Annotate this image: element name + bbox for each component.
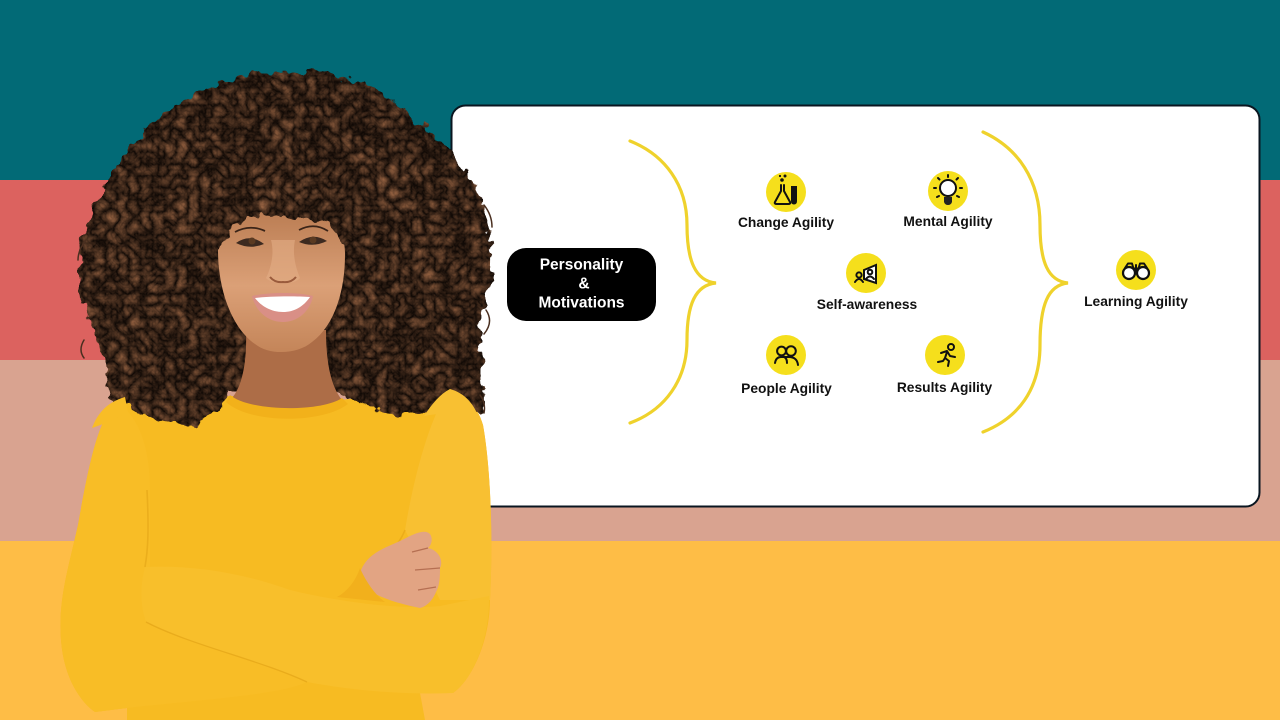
sweater cuff bbox=[337, 568, 385, 602]
hand fingers bbox=[412, 548, 440, 590]
box: Personality & Motivations: Motivations bbox=[538, 294, 625, 312]
box: Personality & Motivations bbox=[507, 248, 656, 321]
hand bbox=[361, 532, 441, 608]
background band: coral bbox=[0, 180, 1280, 360]
background band: teal bbox=[0, 0, 1280, 180]
sweater collar bbox=[226, 395, 348, 419]
box: Personality & Motivations: Personality bbox=[540, 256, 624, 274]
box: Personality & Motivations: & bbox=[578, 276, 590, 292]
right shoulder over hair bbox=[424, 389, 481, 424]
left sleeve shading bbox=[60, 402, 307, 712]
background band: dusty pink bbox=[0, 360, 1280, 541]
item: Change Agility: Change Agility bbox=[738, 215, 834, 230]
item: Results Agility bbox=[897, 335, 992, 395]
item: Self-awareness bbox=[817, 253, 918, 312]
item: Mental Agility bbox=[903, 171, 993, 229]
crossed forearm bbox=[141, 567, 489, 693]
face bbox=[218, 205, 345, 352]
item: Learning Agility bbox=[1084, 250, 1188, 309]
torso shadow bbox=[145, 490, 405, 568]
right brace bbox=[983, 132, 1068, 432]
hair mass bbox=[79, 71, 491, 424]
item: Change Agility bbox=[738, 172, 834, 230]
background band: amber bbox=[0, 541, 1280, 720]
right sleeve bbox=[405, 390, 491, 600]
eyes bbox=[235, 226, 328, 247]
item: People Agility: People Agility bbox=[741, 381, 832, 396]
bangs bbox=[207, 178, 353, 262]
sweater body bbox=[60, 388, 491, 720]
nose bbox=[270, 277, 296, 282]
item: Mental Agility: Mental Agility bbox=[903, 214, 993, 229]
panel: learning agility diagram bbox=[452, 106, 1260, 506]
item: People Agility bbox=[741, 335, 832, 396]
hair flyaway curls bbox=[78, 205, 492, 413]
left brace bbox=[630, 141, 716, 423]
smile bbox=[252, 293, 313, 322]
neck bbox=[232, 330, 342, 410]
item: Learning Agility: Learning Agility bbox=[1084, 294, 1188, 309]
left shoulder over hair bbox=[92, 397, 128, 428]
nose shading bbox=[266, 240, 300, 283]
item: Self-awareness: Self-awareness bbox=[817, 297, 918, 312]
item: Results Agility: Results Agility bbox=[897, 380, 992, 395]
sleeve crease bbox=[146, 622, 307, 682]
person: woman in yellow sweater bbox=[60, 71, 492, 720]
